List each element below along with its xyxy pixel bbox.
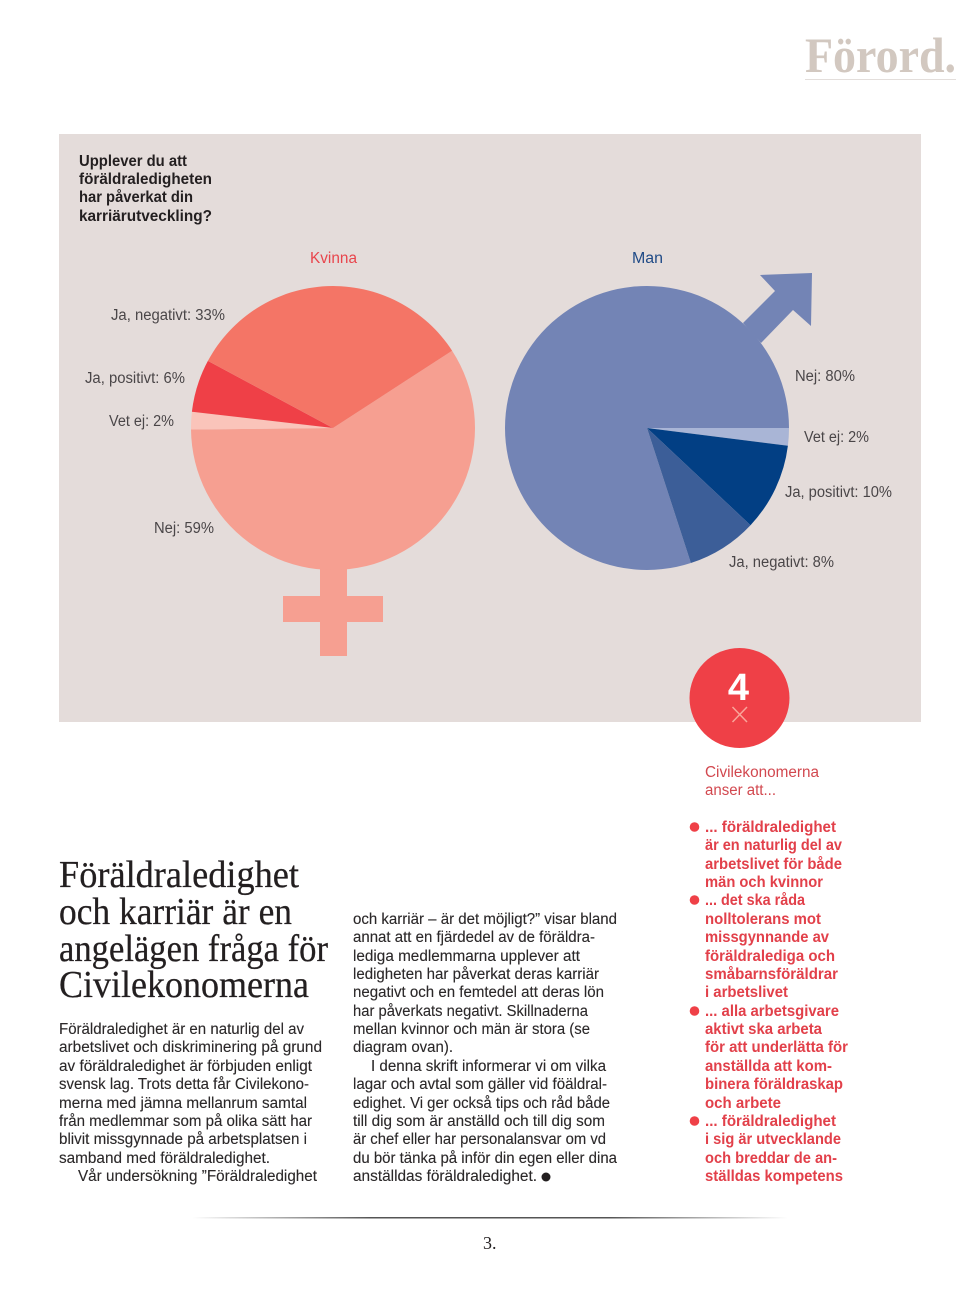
- pie labels: Man: [729, 368, 892, 571]
- article text: middle column: du bör tänka på inför din egen eller dina: [353, 1150, 617, 1167]
- pie labels: Kvinna: Vet ej: 2%: [109, 413, 174, 430]
- pie labels: Man: Vet ej: 2%: [804, 429, 869, 446]
- bullet 1: män och kvinnor: [705, 874, 823, 891]
- article text: middle column: annat att en fjärdedel av de föräldra-: [353, 929, 595, 946]
- callout intro: anser att...: [705, 782, 776, 799]
- bullet 4: [690, 1113, 843, 1185]
- bullet 2: [690, 892, 838, 1001]
- survey question: föräldraledigheten: [79, 171, 212, 188]
- article heading: angelägen fråga för: [59, 928, 328, 970]
- article text: middle column: I denna skrift informerar vi om vilka: [371, 1058, 606, 1075]
- article text: middle column: och karriär – är det möjligt?” visar bland: [353, 911, 617, 928]
- article text: middle column: är chef eller har personalansvar om vd: [353, 1131, 606, 1148]
- article text: left column: blivit missgynnade på arbetsplatsen i: [59, 1131, 307, 1148]
- pie labels: Kvinna: Ja, positivt: 6%: [85, 370, 185, 387]
- article text: middle column: negativt och en femtedel att deras lön: [353, 984, 604, 1001]
- article text: left column: Föräldraledighet är en naturlig del av: [59, 1021, 304, 1038]
- article text: middle column: edighet. Vi ger också tips och råd både: [353, 1095, 610, 1112]
- article text: middle column: lagar och avtal som gäller vid föäldral-: [353, 1076, 607, 1093]
- slice: Nej 59%: [191, 351, 475, 570]
- survey question: karriärutveckling?: [79, 208, 212, 225]
- bullet 3: ... alla arbetsgivare: [705, 1003, 839, 1020]
- article text: middle column: till dig som är anställd och till dig som: [353, 1113, 605, 1130]
- pie labels: Man: Ja, positivt: 10%: [785, 484, 892, 501]
- callout intro: Civilekonomerna: [705, 764, 819, 781]
- bullet 4: ... föräldraledighet: [705, 1113, 836, 1130]
- article heading: och karriär är en: [59, 891, 292, 933]
- bullet 1: arbetslivet för både: [705, 856, 842, 873]
- slice: Nej 80%: [505, 286, 789, 570]
- badge: 4 times: [690, 648, 790, 748]
- bullet 1: ... föräldraledighet: [705, 819, 836, 836]
- bullet 4: och breddar de an-: [705, 1150, 837, 1167]
- bullet 3: [690, 1003, 848, 1112]
- label: Kvinna: Kvinna: [310, 250, 357, 267]
- chart: female symbol pie: [191, 286, 475, 656]
- page number: 3.: [483, 1233, 496, 1253]
- bullet 2: ... det ska råda: [705, 892, 805, 909]
- bullet 1: är en naturlig del av: [705, 837, 842, 854]
- end mark bullet: [542, 1172, 550, 1182]
- article heading: Civilekonomerna: [59, 964, 309, 1006]
- article text: left column: Vår undersökning ”Föräldraledighet: [78, 1168, 318, 1185]
- slice: Vet ej 2%: [191, 412, 333, 430]
- callout intro: [705, 764, 819, 799]
- survey question: Upplever du att: [79, 153, 187, 170]
- article text: middle column: mellan kvinnor och män är stora (se: [353, 1021, 590, 1038]
- article text: middle column: diagram ovan).: [353, 1039, 453, 1056]
- slice: Ja, positivt 10%: [647, 428, 788, 525]
- bullet 2: nolltolerans mot: [705, 911, 821, 928]
- survey question: [79, 153, 212, 225]
- article text: middle column: ledigheten har påverkat deras karriär: [353, 966, 599, 983]
- article text: middle column: anställdas föräldraledighet.: [353, 1168, 537, 1185]
- bullet 3: aktivt ska arbeta: [705, 1021, 822, 1038]
- bullet 2: föräldralediga och: [705, 948, 835, 965]
- article text: left column: arbetslivet och diskriminering på grund: [59, 1039, 322, 1056]
- pie labels: Man: Ja, negativt: 8%: [729, 554, 834, 571]
- article text: left column: [59, 1021, 322, 1185]
- article heading: [59, 854, 328, 1006]
- article text: left column: samband med föräldraledighet.: [59, 1150, 270, 1167]
- bullet 4: ställdas kompetens: [705, 1168, 843, 1185]
- bullet 3: för att underlätta för: [705, 1039, 848, 1056]
- bullet 2: i arbetslivet: [705, 984, 788, 1001]
- pie labels: Man: Nej: 80%: [795, 368, 855, 385]
- slice: Vet ej 2%: [647, 428, 789, 446]
- bullet 3: och arbete: [705, 1095, 781, 1112]
- female symbol cross: [283, 560, 383, 656]
- slice: Ja, negativt 33%: [208, 286, 452, 428]
- label: Man: Man: [632, 250, 663, 267]
- article heading: Föräldraledighet: [59, 854, 299, 896]
- bullet 3: anställda att kom-: [705, 1058, 832, 1075]
- bullet 2: missgynnande av: [705, 929, 829, 946]
- survey question: har påverkat din: [79, 189, 193, 206]
- slice: Ja, positivt 6%: [192, 361, 333, 428]
- bullet 2: småbarnsföräldrar: [705, 966, 838, 983]
- article text: left column: merna med jämna mellanrum samtal: [59, 1095, 307, 1112]
- pie labels: Kvinna: [85, 307, 225, 537]
- male symbol arrow: [743, 273, 812, 343]
- article text: middle column: [353, 911, 617, 1185]
- article text: left column: svensk lag. Trots detta får Civilekono-: [59, 1076, 309, 1093]
- article text: middle column: lediga medlemmarna upplever att: [353, 948, 581, 965]
- callout list: Civilekonomerna anser att: [690, 819, 848, 1185]
- badge: 4 times: 4: [728, 667, 749, 709]
- article text: left column: av föräldraledighet är förbjuden enligt: [59, 1058, 313, 1075]
- article text: left column: från medlemmar som på olika sätt har: [59, 1113, 312, 1130]
- pie labels: Kvinna: Nej: 59%: [154, 520, 214, 537]
- panel: survey chart background: [59, 134, 921, 722]
- bullet 4: i sig är utvecklande: [705, 1131, 841, 1148]
- chart: male symbol pie: [505, 273, 812, 570]
- slice: Ja, negativt 8%: [647, 428, 750, 563]
- bullet 1: [690, 819, 842, 891]
- article text: middle column: har påverkats negativt. Skillnaderna: [353, 1003, 588, 1020]
- pie labels: Kvinna: Ja, negativt: 33%: [111, 307, 225, 324]
- bullet 3: binera föräldraskap: [705, 1076, 843, 1093]
